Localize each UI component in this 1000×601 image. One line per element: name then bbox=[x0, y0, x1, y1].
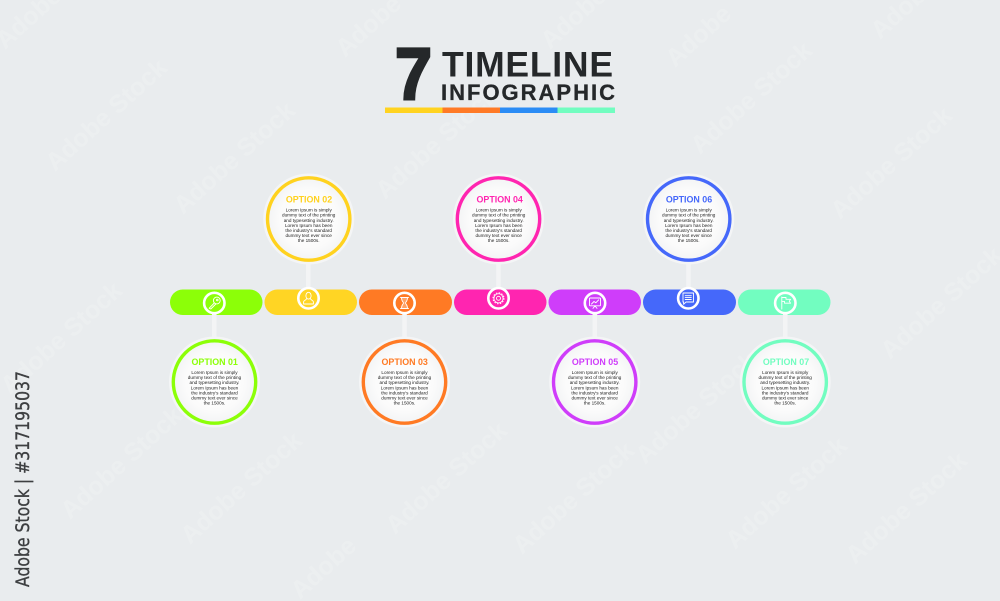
heading: OPTION 02 bbox=[286, 194, 332, 204]
body text: and typesetting industry. bbox=[380, 380, 429, 385]
option 02 bbox=[263, 174, 354, 308]
body text: and typesetting industry. bbox=[190, 380, 239, 385]
body text: Lorem Ipsum is simply bbox=[191, 370, 238, 375]
icon: person bbox=[298, 288, 319, 308]
circle panel bbox=[169, 336, 260, 428]
body text: Lorem Ipsum is simply bbox=[476, 208, 522, 213]
body text: the 1500s. bbox=[488, 238, 510, 243]
heading: OPTION 01 bbox=[192, 357, 238, 367]
option 03 bbox=[359, 293, 450, 428]
circle panel bbox=[740, 336, 831, 428]
watermark pattern: Adobe Stock bbox=[40, 53, 173, 176]
connector bbox=[686, 260, 691, 290]
body text: Lorem Ipsum has been bbox=[665, 223, 713, 228]
body text: the industry's standard bbox=[285, 228, 332, 233]
body text: dummy text ever since bbox=[762, 396, 809, 400]
body text: the industry's standard bbox=[191, 390, 238, 395]
body text: Lorem Ipsum has been bbox=[285, 223, 333, 228]
body text: Lorem Ipsum has been bbox=[381, 385, 429, 390]
connector bbox=[306, 260, 310, 290]
connector bbox=[593, 312, 597, 342]
circle panel bbox=[263, 174, 354, 264]
connector bbox=[496, 260, 501, 290]
watermark pattern: Adobe Stock bbox=[55, 401, 188, 524]
watermark pattern: Adobe Stock bbox=[380, 416, 513, 539]
heading: INFOGRAPHIC: INFOGRAPHIC bbox=[441, 80, 615, 105]
body text: the 1500s. bbox=[204, 401, 225, 406]
watermark pattern: Adobe Stock bbox=[175, 426, 308, 549]
connector bbox=[212, 312, 216, 342]
heading: OPTION 07 bbox=[763, 357, 809, 367]
watermark pattern: Adobe Stock bbox=[370, 81, 503, 204]
body text: Lorem Ipsum is simply bbox=[666, 208, 712, 213]
body text: dummy text ever since bbox=[381, 396, 428, 400]
body text: the 1500s. bbox=[394, 401, 415, 406]
body text: Lorem Ipsum is simply bbox=[286, 208, 332, 213]
body text: Lorem Ipsum has been bbox=[475, 223, 523, 228]
body text: dummy text ever since bbox=[665, 233, 712, 238]
body text: dummy text of the printing bbox=[568, 375, 622, 380]
body text: the 1500s. bbox=[584, 401, 606, 406]
icon: hourglass bbox=[394, 293, 415, 313]
icon: flag bbox=[775, 293, 796, 313]
adobe stock id label: Adobe Stock | #317195037 bbox=[13, 371, 34, 587]
body text: Lorem Ipsum has been bbox=[191, 385, 239, 390]
body text: dummy text of the printing bbox=[188, 375, 242, 380]
option 04 bbox=[453, 174, 544, 308]
body text: Lorem Ipsum is simply bbox=[381, 370, 428, 375]
watermark pattern: Adobe Stock bbox=[685, 36, 818, 159]
body text: Lorem Ipsum has been bbox=[571, 385, 619, 390]
body text: dummy text of the printing bbox=[378, 375, 432, 380]
watermark pattern: Adobe Stock bbox=[720, 431, 853, 554]
heading: TIMELINE: TIMELINE bbox=[442, 44, 613, 84]
body text: dummy text ever since bbox=[475, 233, 522, 238]
watermark pattern: Adobe Stock bbox=[168, 96, 301, 219]
title colour bar bbox=[385, 108, 615, 113]
body text: dummy text ever since bbox=[285, 233, 332, 238]
body text: the industry's standard bbox=[381, 390, 428, 395]
heading: OPTION 03 bbox=[382, 357, 428, 367]
watermark pattern: Adobe Stock bbox=[630, 346, 763, 469]
body text: the 1500s. bbox=[298, 238, 320, 243]
watermark pattern: Adobe Stock bbox=[840, 446, 973, 569]
circle panel bbox=[549, 336, 640, 428]
circle panel bbox=[453, 174, 544, 264]
body text: the 1500s. bbox=[774, 401, 796, 406]
icon: key bbox=[204, 293, 224, 313]
body text: the industry's standard bbox=[762, 390, 809, 395]
heading: OPTION 06 bbox=[666, 194, 712, 204]
body text: the industry's standard bbox=[571, 390, 618, 395]
body text: dummy text of the printing bbox=[472, 213, 526, 218]
icon: speech bubble bbox=[678, 288, 698, 308]
numeral 7: 7 bbox=[395, 34, 432, 115]
watermark pattern: Adobe Stock bbox=[825, 101, 958, 224]
body text: and typesetting industry. bbox=[474, 218, 524, 223]
body text: and typesetting industry. bbox=[664, 218, 714, 223]
option 07 bbox=[740, 293, 831, 428]
body text: dummy text ever since bbox=[571, 396, 618, 400]
body text: Lorem Ipsum is simply bbox=[572, 370, 618, 375]
icon: gear bbox=[488, 288, 509, 308]
body text: dummy text of the printing bbox=[662, 213, 716, 218]
option 06 bbox=[643, 174, 734, 308]
body text: dummy text of the printing bbox=[282, 213, 336, 218]
watermark pattern: Adobe Stock bbox=[507, 436, 640, 559]
body text: and typesetting industry. bbox=[570, 380, 620, 385]
body text: Lorem Ipsum is simply bbox=[762, 370, 809, 375]
body text: the industry's standard bbox=[475, 228, 522, 233]
body text: dummy text of the printing bbox=[758, 375, 812, 380]
body text: and typesetting industry. bbox=[760, 380, 810, 385]
icon: presentation chart bbox=[585, 293, 605, 313]
heading: OPTION 05 bbox=[572, 357, 618, 367]
connector bbox=[783, 312, 788, 342]
circle panel bbox=[359, 336, 450, 428]
connector bbox=[402, 312, 407, 342]
body text: and typesetting industry. bbox=[284, 218, 334, 223]
option 01 bbox=[169, 293, 260, 428]
body text: the industry's standard bbox=[665, 228, 712, 233]
watermark pattern: Adobe bbox=[660, 0, 737, 72]
circle panel bbox=[643, 174, 734, 264]
title bbox=[385, 34, 615, 115]
heading: OPTION 04 bbox=[477, 194, 523, 204]
option 05 bbox=[549, 293, 640, 428]
body text: dummy text ever since bbox=[191, 396, 238, 400]
timeline bars bbox=[170, 290, 830, 315]
body text: the 1500s. bbox=[678, 238, 700, 243]
body text: Lorem Ipsum has been bbox=[761, 385, 809, 390]
